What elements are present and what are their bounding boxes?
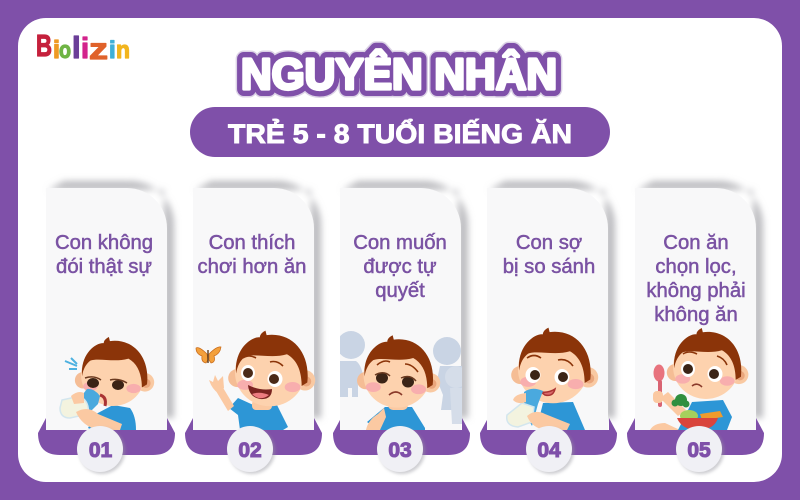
caption 05: không phải: [646, 280, 746, 302]
number 04: 04: [537, 439, 561, 462]
caption 03: quyết: [375, 280, 425, 302]
sweat marks: [65, 358, 77, 369]
panel: cause 02: [185, 181, 322, 474]
broccoli: [672, 394, 690, 408]
caption 05: Con ăn: [663, 232, 729, 254]
title: NGUYÊN NHÂN: NGUYÊN NHÂN: [241, 49, 557, 99]
number 05: [676, 426, 724, 474]
caption 03: Con muốn: [353, 232, 447, 254]
baby 04 with bottle: [507, 328, 598, 430]
logo: Biolizin: i: [53, 36, 60, 64]
number 01: [77, 426, 125, 474]
baby 02 waving: [209, 331, 315, 430]
logo: Biolizin: i: [109, 37, 116, 64]
logo: Biolizin: [36, 28, 130, 66]
caption 01: đói thật sự: [56, 256, 152, 278]
subtitle pill: [190, 107, 610, 157]
butterfly: [196, 347, 221, 363]
panel: cause 03: [333, 181, 470, 474]
title: NGUYÊN NHÂN: NGUYÊN NHÂN: [241, 49, 557, 99]
panel: cause 01: [38, 181, 175, 474]
number 05: 05: [687, 439, 711, 462]
panel: cause 05: [627, 181, 764, 474]
title: NGUYÊN NHÂN: NGUYÊN NHÂN: [241, 49, 557, 99]
logo: Biolizin: i: [81, 33, 89, 65]
logo: Biolizin: z: [89, 33, 108, 66]
panel: cause 04: [480, 181, 617, 474]
number 02: 02: [238, 439, 262, 462]
baby 01 drinking milk: [60, 337, 154, 430]
silhouettes of other children: [337, 331, 467, 424]
caption 01: Con không: [55, 232, 153, 254]
bowl of food: [677, 410, 723, 430]
baby 05 with spoon and food: [650, 328, 748, 430]
logo: Biolizin: o: [59, 37, 71, 64]
number 04: [526, 426, 574, 474]
logo: Biolizin: n: [116, 37, 130, 64]
number 03: 03: [388, 439, 412, 462]
spoon: [653, 364, 664, 407]
subtitle pill: TRẺ 5 - 8 TUỔI BIẾNG ĂN: [228, 117, 572, 149]
logo: Biolizin: l: [72, 30, 81, 65]
number 01: 01: [89, 439, 112, 462]
caption 04: bị so sánh: [503, 256, 595, 278]
caption 02: chơi hơn ăn: [198, 256, 306, 278]
number 03: [377, 426, 425, 474]
caption 03: được tự: [363, 256, 437, 278]
baby 03 thinking: [357, 335, 440, 430]
caption 04: Con sợ: [516, 232, 582, 254]
caption 05: không ăn: [654, 304, 738, 326]
number 02: [227, 426, 275, 474]
caption 05: chọn lọc,: [655, 256, 737, 278]
logo: Biolizin: B: [36, 28, 52, 63]
caption 02: Con thích: [209, 232, 295, 254]
